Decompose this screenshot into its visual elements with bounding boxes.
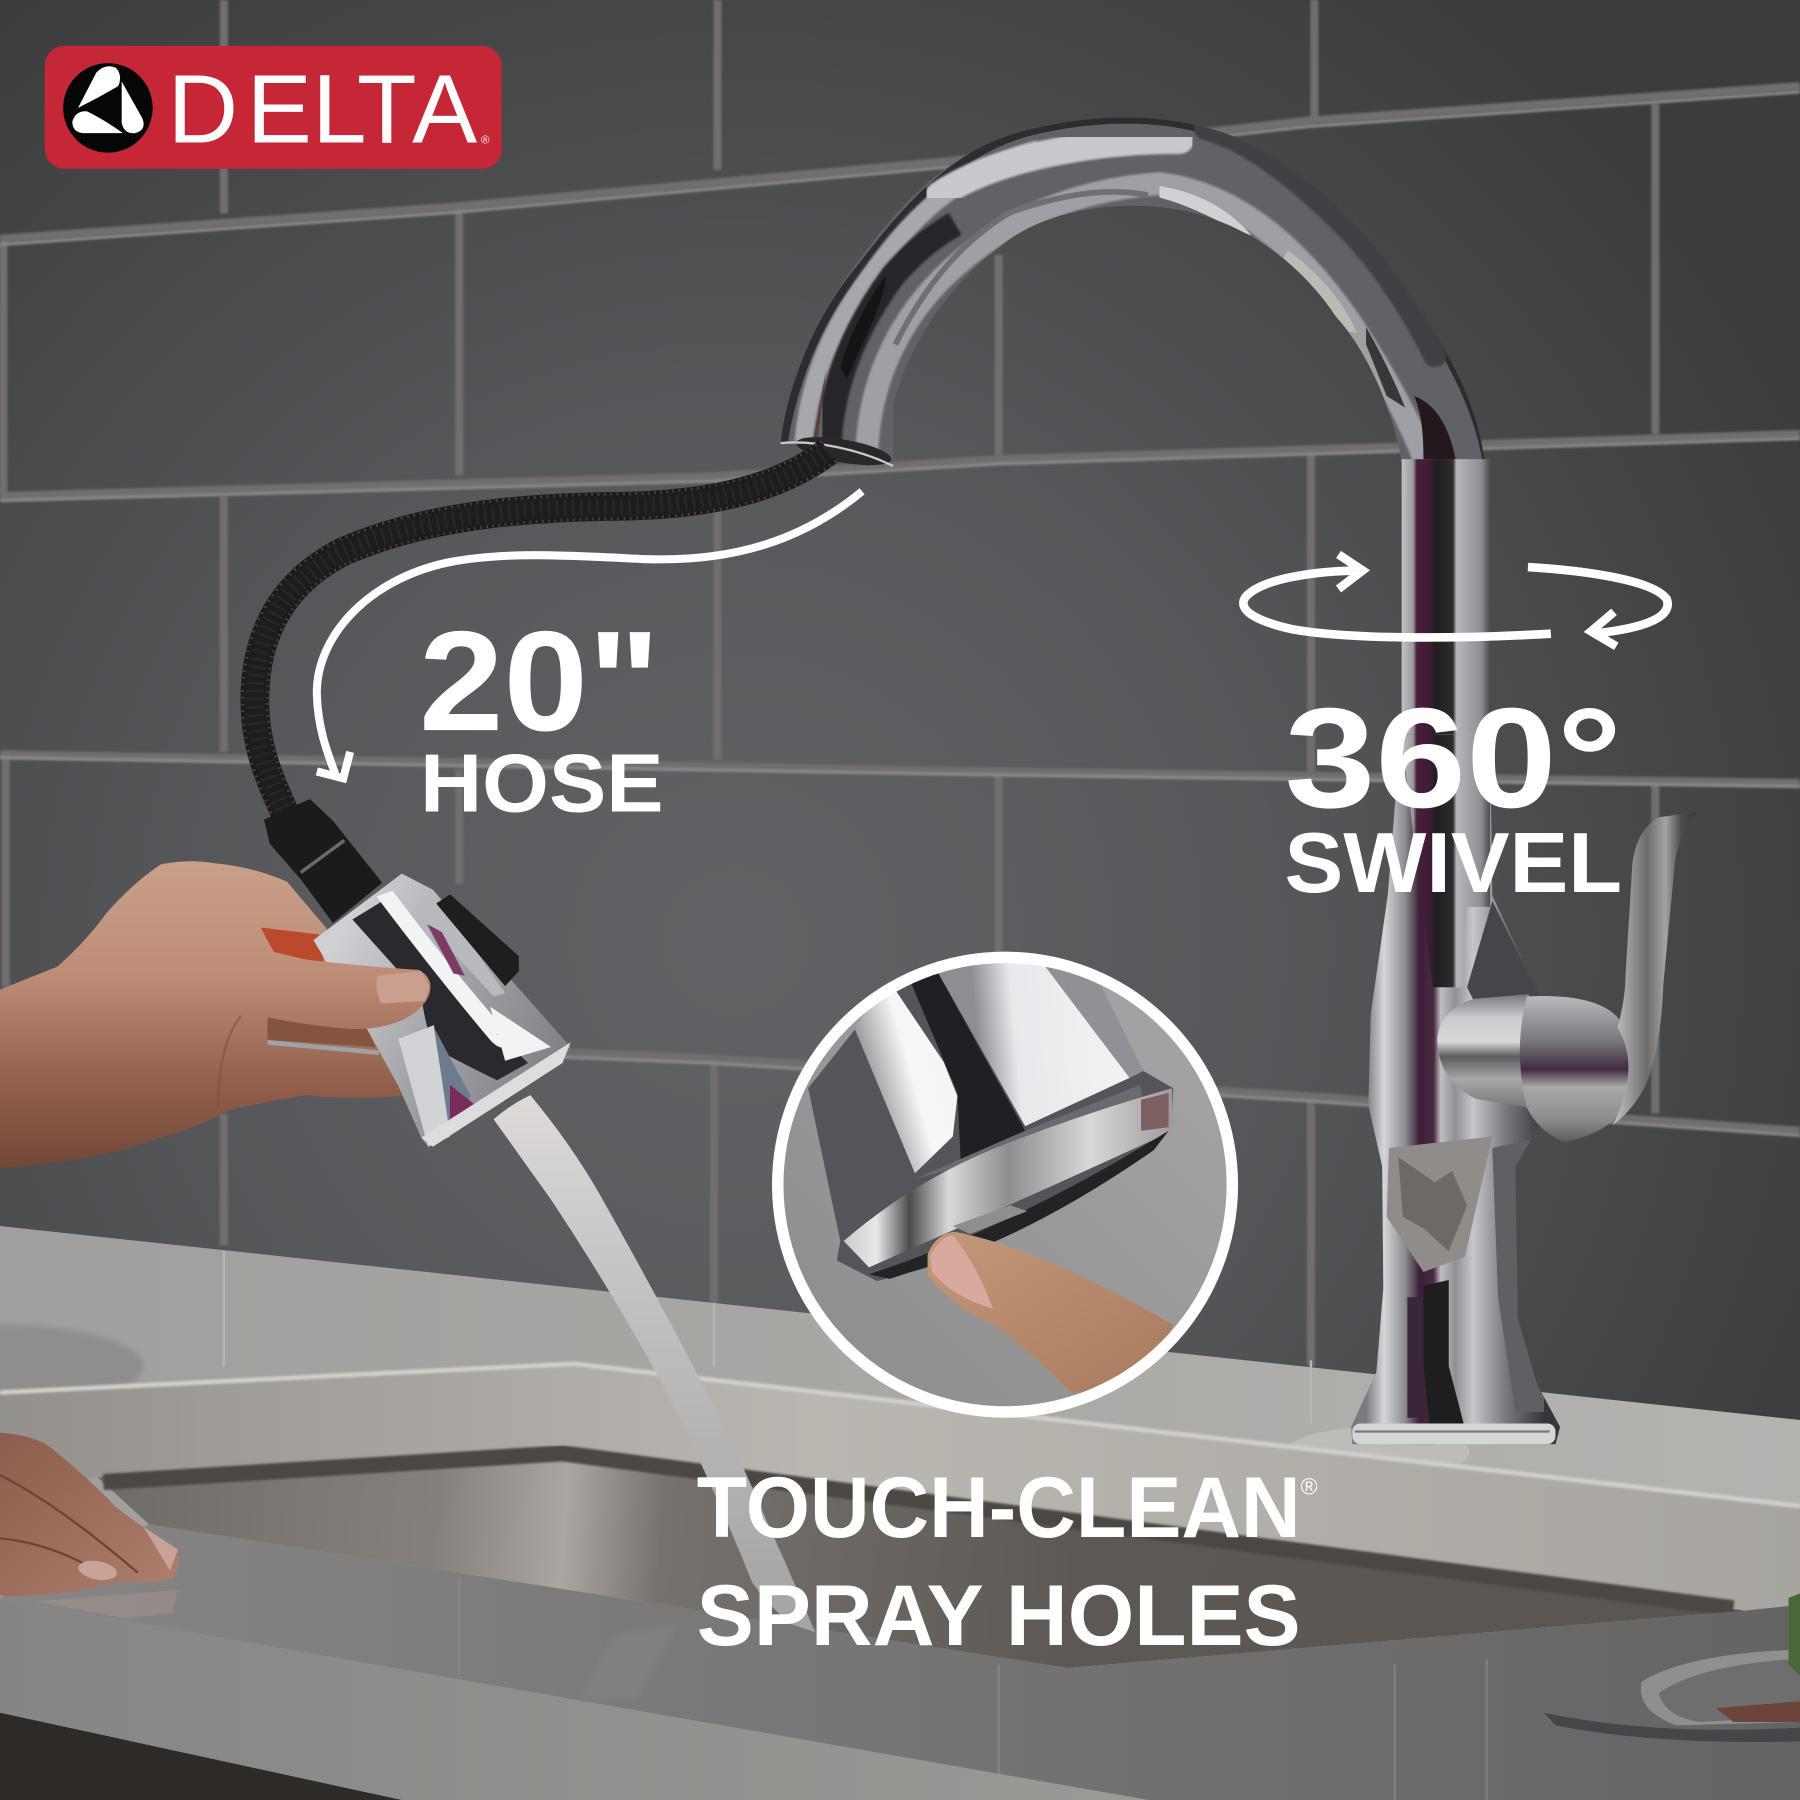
heading: touch-clean spray holes: SPRAY HOLES — [697, 1568, 1301, 1664]
sink basin — [98, 1449, 1745, 1668]
logo emblem — [63, 63, 153, 153]
sprayer head — [264, 799, 571, 1147]
hand behind sprayer — [0, 861, 402, 1169]
faucet spout — [780, 118, 1484, 467]
heading: 360 degree swivel — [1285, 679, 1622, 910]
pull-down hose — [255, 451, 829, 817]
fingertip — [928, 1232, 1173, 1394]
Delta logo — [45, 46, 502, 169]
water stream — [494, 1095, 815, 1632]
heading: 360 degree swivel: SWIVEL — [1285, 815, 1622, 910]
faucet handle — [1437, 812, 1698, 1142]
faucet lower body — [1351, 459, 1560, 1444]
swivel arrows — [1243, 554, 1668, 646]
spray head close-up — [808, 953, 1173, 1394]
inset detail circle — [778, 953, 1232, 1412]
countertop — [0, 1226, 1800, 1800]
heading: 20 inch hose: 20" — [419, 602, 660, 761]
heading: 20 inch hose: HOSE — [420, 737, 664, 830]
hose arrow — [317, 491, 862, 778]
lower left hand — [0, 1433, 179, 1596]
heading: touch-clean spray holes: ® — [1301, 1474, 1318, 1500]
plate and fork — [1544, 1593, 1800, 1742]
heading: touch-clean spray holes — [697, 1460, 1318, 1664]
Delta logo: DELTA — [168, 54, 477, 163]
heading: 360 degree swivel: 360° — [1285, 679, 1622, 838]
heading: touch-clean spray holes: TOUCH-CLEAN — [697, 1460, 1301, 1556]
front counter — [0, 1524, 1800, 1800]
Delta logo: ® — [481, 134, 490, 146]
thumb over sprayer — [135, 941, 430, 1108]
heading: 20 inch hose — [419, 602, 664, 830]
